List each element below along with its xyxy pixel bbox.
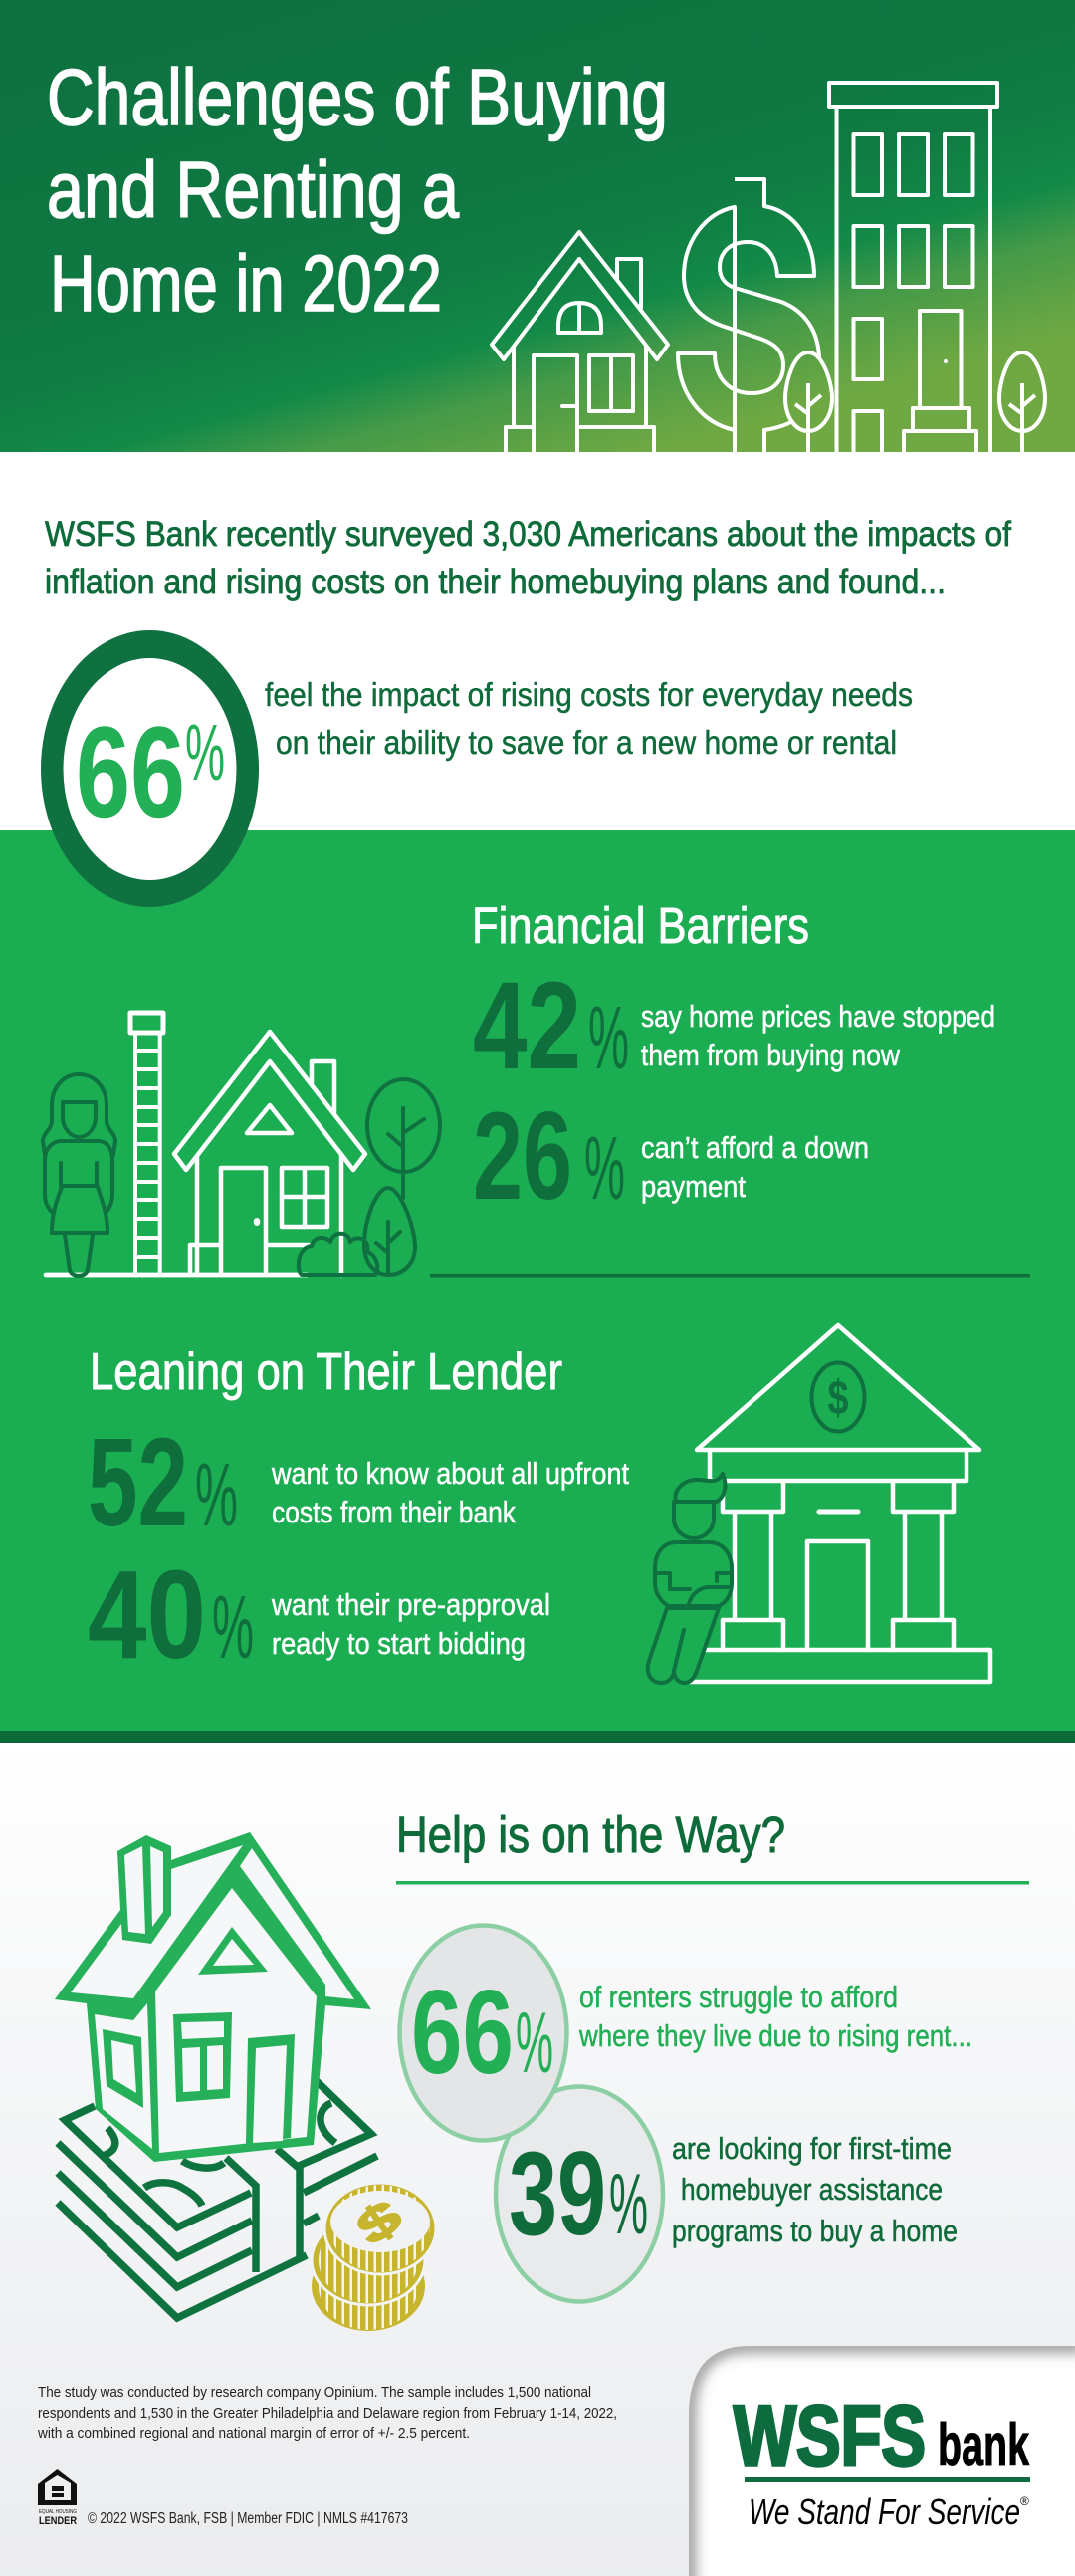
text: homebuyer assistance: programs to buy a home xyxy=(672,2214,958,2248)
icon: apartment building xyxy=(829,83,997,452)
icon: house xyxy=(55,1832,371,2162)
logo: bank: bank xyxy=(938,2412,1029,2478)
icon: left tree xyxy=(785,352,832,452)
logo: WSFS: WSFS xyxy=(734,2389,926,2484)
icon: small tree xyxy=(364,1188,415,1275)
text: homebuyer assistance: are looking for first-time xyxy=(672,2131,952,2166)
stat: 66 percent bubble: 66 xyxy=(411,1966,514,2099)
panel: white intro background xyxy=(0,452,1075,830)
icon: right tree xyxy=(999,352,1045,452)
text: pre-approval xyxy=(271,1587,550,1661)
stat text: everyday needs: on their ability to save for a new home or rental xyxy=(276,724,897,761)
stat: 42 percent: 42 xyxy=(473,957,581,1095)
text: home prices xyxy=(641,999,995,1072)
stat: 42 percent: % xyxy=(588,989,629,1088)
ground line xyxy=(46,1273,307,1277)
stat: 40 percent: % xyxy=(212,1578,254,1678)
stat: 39 percent bubble: % xyxy=(609,2157,648,2252)
title xyxy=(47,53,668,328)
text: upfront costs: costs from their bank xyxy=(272,1495,516,1529)
icon: ladder xyxy=(130,1013,163,1275)
stat: 52 percent: 52 xyxy=(88,1412,188,1552)
title: and Renting a xyxy=(47,145,459,234)
text: upfront costs xyxy=(271,1456,629,1529)
footnote text: The study was conducted by research company Opinium. The sample includes 1,500 national xyxy=(38,2385,591,2401)
panel: logo card xyxy=(689,2346,1075,2576)
heading: help is on the way: Help is on the Way? xyxy=(396,1806,785,1863)
text: homebuyer assistance xyxy=(672,2131,958,2248)
footnote text: respondents and 1,530 in the Greater Philadelphia and Delaware region from February 1-14, 2022, xyxy=(38,2406,617,2422)
icon: house xyxy=(174,1032,365,1275)
illustration: house on stack of money xyxy=(55,1832,436,2331)
text: renters: where they live due to rising rent... xyxy=(578,2018,972,2053)
heading: leaning on their lender: Leaning on Their Lender xyxy=(90,1343,562,1401)
icon: equal housing lender: LENDER xyxy=(39,2515,77,2527)
icon: man leaning xyxy=(648,1474,732,1683)
text: renters: of renters struggle to afford xyxy=(579,1980,898,2014)
copyright line: © 2022 WSFS Bank, FSB | Member FDIC | NMLS #417673 xyxy=(88,2510,408,2527)
icon: dollar sign xyxy=(678,179,819,452)
footnote text xyxy=(37,2385,617,2442)
text: down payment xyxy=(641,1130,869,1204)
stat: 66 percent ring: % xyxy=(185,708,225,797)
text: upfront costs: want to know about all upfront xyxy=(271,1456,629,1491)
icon: tall tree xyxy=(367,1079,440,1198)
illustration: bank and man xyxy=(648,1325,990,1683)
title: Home in 2022 xyxy=(50,239,442,328)
stat: 66 percent bubble: % xyxy=(516,1995,553,2091)
text: pre-approval: want their pre-approval xyxy=(271,1587,550,1622)
panel: lower section background xyxy=(0,1743,1075,2576)
illustration: woman, ladder, house and trees xyxy=(43,1013,440,1276)
icon: house xyxy=(492,232,668,452)
icon: bank building xyxy=(690,1325,990,1682)
icon: equal housing lender xyxy=(38,2469,77,2527)
stat text: everyday needs xyxy=(265,676,913,761)
dark band xyxy=(0,1731,1075,1743)
stat: 40 percent: 40 xyxy=(88,1544,206,1685)
stat: 66 percent ring xyxy=(41,630,259,907)
stat: 26 percent: 26 xyxy=(473,1087,572,1226)
icon: woman xyxy=(43,1074,115,1276)
icon: equal housing lender: EQUAL HOUSING xyxy=(39,2509,77,2515)
icon: gold coins xyxy=(312,2183,436,2331)
text: home prices: them from buying now xyxy=(641,1038,901,1072)
text: homebuyer assistance: homebuyer assistance xyxy=(681,2172,943,2207)
header gradient background xyxy=(0,0,1075,452)
icon: dollar coin: $ xyxy=(828,1372,849,1425)
icon: gold coins: $ xyxy=(347,2189,411,2256)
text: pre-approval: ready to start bidding xyxy=(272,1626,526,1661)
stat: 66 percent bubble xyxy=(400,1926,567,2141)
text: down payment: can’t afford a down xyxy=(641,1130,869,1165)
intro text xyxy=(45,515,1011,601)
footnote text: with a combined regional and national margin of error of +/- 2.5 percent. xyxy=(37,2426,470,2442)
heading: financial barriers: Financial Barriers xyxy=(472,897,809,954)
stat: 26 percent: % xyxy=(584,1119,625,1219)
stat text: everyday needs: feel the impact of rising costs for everyday needs xyxy=(265,676,913,713)
stat: 39 percent bubble xyxy=(496,2087,663,2302)
stat: 52 percent: % xyxy=(195,1446,238,1545)
panel: header xyxy=(0,0,1075,452)
stat: 66 percent ring: 66 xyxy=(76,699,185,844)
text: down payment: payment xyxy=(641,1169,746,1204)
title: Challenges of Buying xyxy=(47,53,668,141)
icon: bush xyxy=(299,1234,377,1275)
icon: money stack xyxy=(58,2081,377,2318)
icon: dollar coin xyxy=(812,1362,864,1432)
panel: green section xyxy=(0,830,1075,1731)
text: home prices: say home prices have stopped xyxy=(641,999,995,1034)
intro text: inflation and rising costs on their homebuying plans and found... xyxy=(45,563,946,601)
logo: registered mark: ® xyxy=(1020,2494,1029,2508)
text: renters xyxy=(578,1980,972,2053)
stat: 39 percent bubble: 39 xyxy=(509,2127,606,2260)
